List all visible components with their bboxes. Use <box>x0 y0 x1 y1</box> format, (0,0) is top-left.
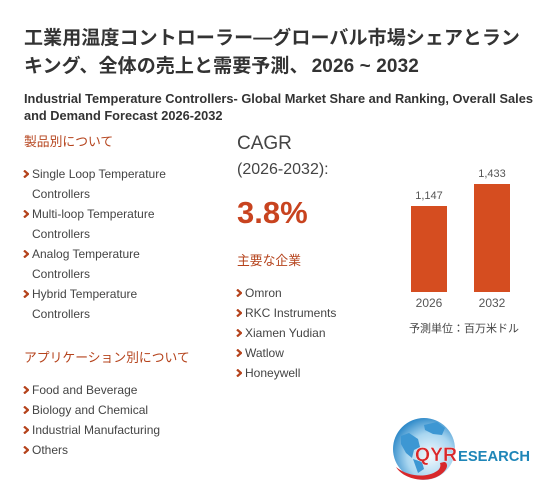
heading: by product: 製品別について <box>24 134 113 149</box>
CAGR label: CAGR <box>237 133 292 154</box>
title <box>24 28 520 77</box>
bar: 2032: 2032 <box>479 296 506 310</box>
subtitle: Industrial Temperature Controllers- Global Market Share and Ranking, Overall Sales <box>24 91 533 106</box>
list: applications: Biology and Chemical <box>32 403 148 417</box>
list: product types: Hybrid Temperature <box>32 287 137 301</box>
logo: QYResearch <box>393 418 530 480</box>
list: companies: Honeywell <box>245 366 300 380</box>
list: product types: Single Loop Temperature <box>32 167 166 181</box>
swoosh <box>396 462 447 480</box>
globe <box>393 418 455 480</box>
bar chart <box>411 168 510 310</box>
heading: by application: アプリケーション別について <box>24 350 190 365</box>
subtitle: and Demand Forecast 2026-2032 <box>24 108 222 123</box>
bar: 2026 <box>411 190 447 310</box>
title: キング、全体の売上と需要予測、2026 ~ 2032 <box>24 56 419 77</box>
subtitle <box>24 91 533 123</box>
list: applications: Others <box>32 443 68 457</box>
list: product types: Controllers <box>32 267 90 281</box>
list: product types: Multi-loop Temperature <box>32 207 155 221</box>
list: product types: Controllers <box>32 187 90 201</box>
list: product types <box>23 167 166 321</box>
list: applications: Food and Beverage <box>32 383 137 397</box>
wordmark: ESEARCH <box>458 448 530 465</box>
list: product types: Analog Temperature <box>32 247 140 261</box>
list: product types: Controllers <box>32 227 90 241</box>
list: applications <box>23 383 160 457</box>
bar: 2032: 1,433 <box>478 168 506 180</box>
wordmark <box>415 444 530 466</box>
CAGR value: 3.8% <box>237 195 308 230</box>
bar: 2026: 2026 <box>416 296 443 310</box>
wordmark: QYR <box>415 444 457 466</box>
chart unit note: 予測単位：百万米ドル <box>409 323 519 335</box>
title: 工業用温度コントローラー―グローバル市場シェアとラン <box>24 28 520 49</box>
list: product types: Controllers <box>32 307 90 321</box>
list: companies: Xiamen Yudian <box>245 326 326 340</box>
list: companies: Watlow <box>245 346 284 360</box>
list: companies: RKC Instruments <box>245 306 336 320</box>
heading: key companies: 主要な企業 <box>237 253 301 268</box>
bar: 2032 <box>474 168 510 310</box>
list: companies: Omron <box>245 286 282 300</box>
CAGR period: (2026-2032): <box>237 161 329 178</box>
list: companies <box>236 286 336 380</box>
bar: 2026: 1,147 <box>415 190 443 202</box>
list: applications: Industrial Manufacturing <box>32 423 160 437</box>
